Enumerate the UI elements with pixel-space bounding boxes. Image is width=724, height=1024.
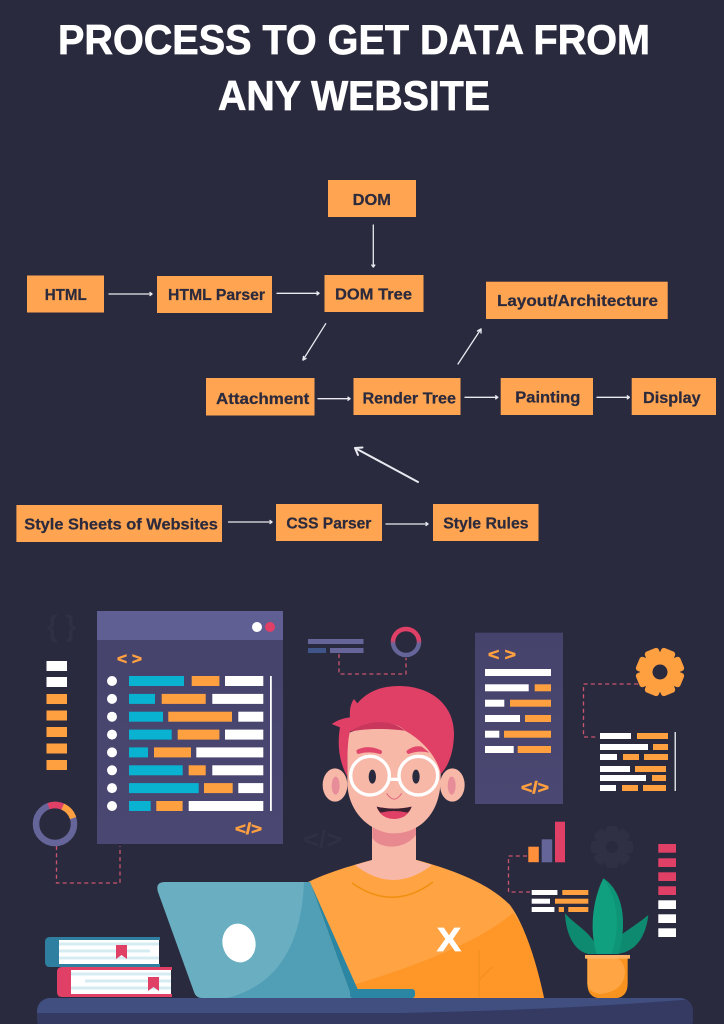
ears [323, 768, 465, 802]
right stacked bars [658, 844, 676, 937]
faint code tag: </> [303, 826, 342, 854]
code lines block [600, 732, 676, 791]
glasses [351, 756, 438, 795]
arrow: render tree to painting [465, 396, 498, 399]
hair [332, 686, 454, 777]
icon: gear [629, 641, 691, 703]
flow diagram [16, 180, 716, 542]
ring icon [393, 629, 419, 655]
head [323, 686, 465, 847]
arrow: style rules to render tree [355, 448, 418, 482]
person [300, 686, 544, 998]
box: Style Sheets of Websites [16, 505, 222, 542]
close tag: </> [235, 821, 262, 838]
top small bars [308, 639, 364, 653]
code rows [107, 676, 272, 811]
arrow: parser to DOM tree [277, 292, 319, 295]
leaves [565, 878, 648, 954]
box: DOM [328, 180, 416, 217]
dashed connector: chart to code lines [508, 856, 530, 892]
books [45, 937, 172, 997]
arrow: render tree to layout [458, 329, 481, 364]
arrow: DOM to DOM tree [372, 225, 375, 267]
panel: code sheet [475, 633, 563, 804]
close tag: </> [521, 778, 549, 797]
arrow: CSS parser to style rules [386, 522, 428, 526]
faint gear [591, 826, 633, 868]
box: CSS Parser: CSS Parser [286, 516, 371, 533]
title [58, 16, 650, 119]
box: HTML Parser: HTML Parser [168, 287, 265, 304]
box: Style Rules [433, 504, 538, 541]
shirt [300, 860, 544, 998]
shirt logo: X [437, 921, 461, 958]
arrow: stylesheets to CSS parser [228, 520, 272, 524]
box: HTML [27, 276, 104, 312]
small code lines [532, 890, 588, 912]
dashed connector: donut to code window [56, 846, 120, 883]
arrow: HTML to parser [109, 292, 152, 296]
arrow: painting to display [597, 396, 629, 399]
code rows [485, 669, 551, 753]
top book [45, 937, 160, 967]
box: Layout/Architecture: Layout/Architecture [497, 293, 658, 310]
title: ANY WEBSITE [218, 72, 490, 119]
box: Painting [501, 378, 593, 415]
box: HTML Parser [157, 276, 272, 313]
box: Attachment [206, 378, 314, 416]
dashed connector: bars to ring [339, 654, 406, 674]
hair shade [350, 722, 405, 732]
box: Render Tree: Render Tree [362, 390, 456, 407]
box: Display [632, 378, 716, 415]
nose [387, 793, 402, 799]
neck [355, 820, 432, 880]
faint curly braces: { } [47, 610, 76, 643]
box: Render Tree [354, 378, 460, 415]
box: Attachment: Attachment [216, 391, 310, 408]
mouth [377, 807, 412, 819]
window header bar [97, 611, 283, 640]
neck shadow [372, 827, 416, 847]
arrow: DOM tree to attachment [303, 324, 326, 360]
eyes [369, 770, 420, 784]
box: Style Rules: Style Rules [443, 516, 529, 533]
pot [585, 955, 630, 998]
box: Painting: Painting [515, 390, 580, 407]
panel: code window [97, 611, 283, 844]
donut chart [36, 805, 74, 843]
plant [565, 878, 648, 998]
laptop [157, 882, 415, 998]
open tag: < > [117, 651, 142, 668]
dashed connector: gear to code lines [584, 684, 638, 737]
mini bar chart [528, 822, 565, 862]
box: Style Sheets of Websites: Style Sheets of Websites [24, 516, 218, 533]
face [347, 717, 441, 833]
title: PROCESS TO GET DATA FROM [58, 16, 650, 63]
box: DOM Tree [324, 275, 424, 312]
illustration [36, 610, 695, 1024]
box: DOM: DOM [353, 192, 391, 209]
box: HTML: HTML [45, 287, 87, 304]
box: CSS Parser [276, 504, 382, 541]
bottom book [57, 967, 172, 997]
eyebrows [357, 746, 429, 754]
left stacked bars [46, 661, 67, 770]
arrow: attachment to render tree [318, 397, 350, 400]
box: Layout/Architecture [486, 282, 668, 319]
box: DOM Tree: DOM Tree [335, 286, 412, 304]
desk [37, 998, 695, 1024]
box: Display: Display [643, 390, 701, 407]
open tag: < > [488, 645, 516, 664]
